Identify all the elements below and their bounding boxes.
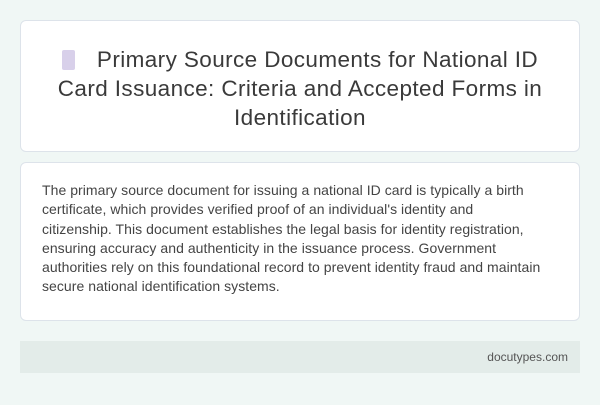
text block: authorities rely on this foundational record to prevent identity fraud and maintain	[42, 259, 540, 275]
title: Primary Source Documents for National ID	[97, 47, 538, 72]
text block: certificate, which provides verified proof of an individual's identity and	[42, 201, 473, 217]
title	[58, 47, 542, 130]
panel: title	[20, 20, 580, 152]
text block: The primary source document for issuing a national ID card is typically a birth	[42, 182, 524, 198]
panel: description	[20, 162, 580, 321]
footer	[20, 341, 580, 373]
text block: secure national identification systems.	[42, 278, 280, 294]
text block: citizenship. This document establishes the legal basis for identity registration,	[42, 221, 524, 237]
title: Card Issuance: Criteria and Accepted Forms in	[58, 76, 542, 101]
icon: document	[62, 50, 75, 70]
text block: ensuring accuracy and authenticity in the issuance process. Government	[42, 240, 496, 256]
title: Identification	[234, 105, 366, 130]
text block	[42, 182, 540, 294]
footer: docutypes.com	[487, 350, 568, 364]
